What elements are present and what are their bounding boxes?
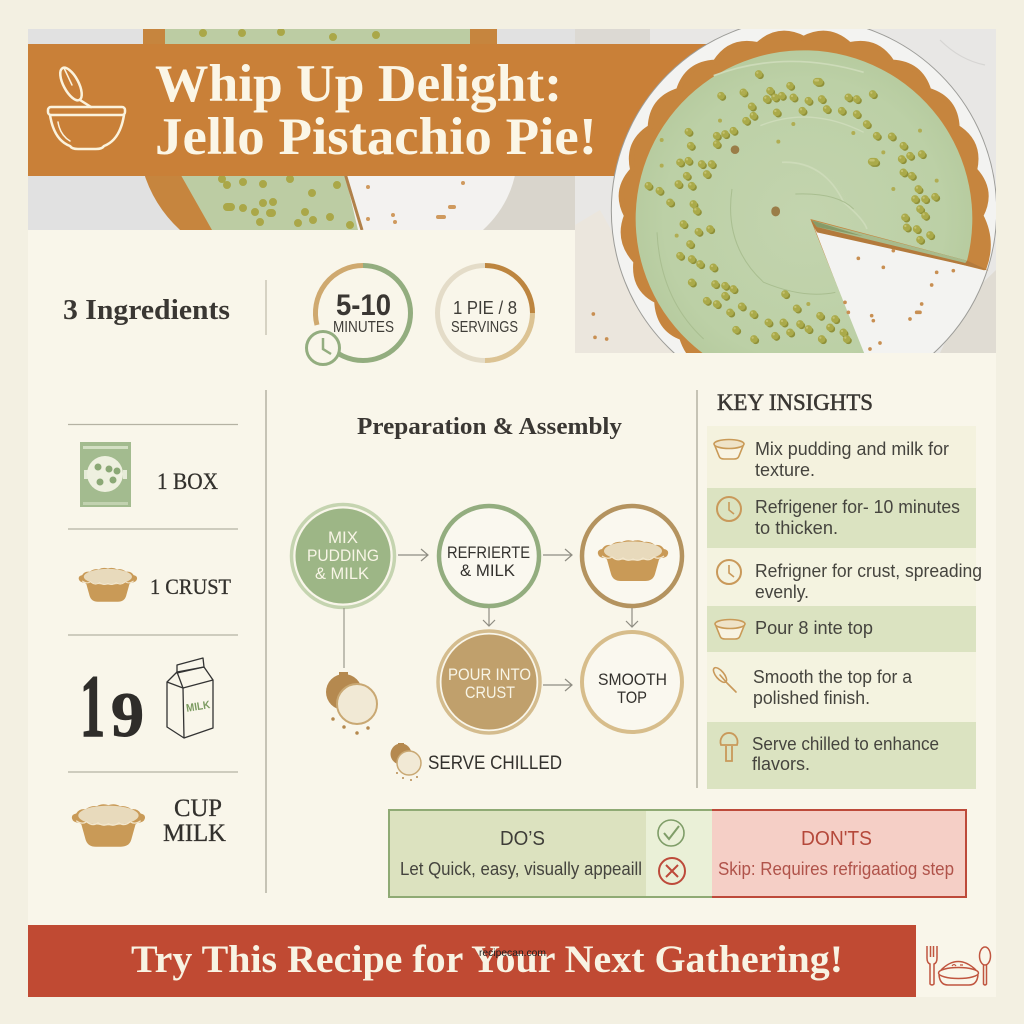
stat ring: time: MINUTES [333, 319, 394, 336]
insight row 2: Refrigener for- 10 minutes [755, 497, 960, 517]
do's text [400, 828, 642, 879]
flow step: refrigerate and milk [439, 506, 539, 606]
icon: pie [72, 804, 145, 847]
insight row 2: to thicken. [755, 518, 838, 538]
footer banner [28, 925, 916, 997]
serve chilled step [390, 743, 562, 780]
stat ring: servings [438, 266, 532, 361]
connector line [343, 608, 345, 668]
insight row 2 [707, 488, 976, 548]
footer banner: recipecan.com [479, 948, 546, 959]
insight row 3 [707, 548, 982, 606]
icon: chilled dessert small [390, 743, 421, 780]
ingredient: cup milk [72, 795, 226, 847]
flow step: smooth top: SMOOTH [598, 670, 667, 689]
icon: fork, pie and spoon [927, 946, 990, 985]
icon: ice cream scoop [720, 733, 738, 761]
flow step: pour into crust: CRUST [465, 683, 515, 702]
don'ts text: DON'TS [801, 828, 872, 850]
serve chilled step: SERVE CHILLED [428, 753, 562, 774]
right header photo: pie with slice removed [592, 29, 996, 353]
do's text: Let Quick, easy, visually appeaill [400, 859, 642, 879]
insight row 3: evenly. [755, 582, 809, 602]
arrow [626, 608, 638, 627]
right header photo background [575, 29, 996, 353]
heading: key insights: KEY INSIGHTS [717, 390, 873, 415]
heading: preparation and assembly: Preparation & Assembly [357, 414, 622, 440]
don'ts text [718, 828, 954, 879]
icon: chilled dessert large [326, 672, 377, 733]
stat ring: time [306, 266, 410, 364]
icon: clock [306, 332, 340, 364]
icon: pudding packet [80, 442, 131, 507]
title text [155, 55, 597, 166]
icon: whisk [711, 666, 736, 692]
flow step: mix pudding and milk: PUDDING [307, 546, 379, 565]
flow step: smooth top [582, 632, 682, 732]
flow step: refrigerate and milk: REFRIERTE [447, 543, 530, 562]
insight row 5: polished finish. [753, 688, 870, 708]
flow step: pour into crust: POUR INTO [448, 665, 531, 684]
insight row 3: Refrigner for crust, spreading [755, 561, 982, 581]
ingredient: pudding box: 1 BOX [157, 469, 218, 494]
insight row 1: Mix pudding and milk for [755, 439, 949, 459]
stat ring: servings: SERVINGS [451, 319, 518, 336]
content panel [28, 230, 996, 997]
don'ts text: Skip: Requires refrigaatiog step [718, 859, 954, 879]
insight row 1 [707, 426, 976, 488]
insight row 4: Pour 8 inte top [755, 618, 873, 638]
icon: check [658, 820, 684, 846]
ingredient: milk quantity: 1 [80, 658, 105, 756]
footer banner: Try This Recipe for Your Next Gathering! [131, 938, 843, 981]
panel: do's and don'ts [389, 810, 966, 897]
insight row 1: texture. [755, 460, 815, 480]
ingredient: cup milk: MILK [163, 820, 226, 847]
insight row 5: Smooth the top for a [753, 667, 913, 687]
arrow [543, 679, 572, 691]
insight row 6 [707, 722, 976, 789]
flow step: refrigerate and milk: & MILK [460, 561, 516, 580]
ingredient: cup milk: CUP [174, 795, 222, 822]
insight row 6: flavors. [752, 754, 810, 774]
flow step: smooth top: TOP [617, 688, 647, 707]
insight row 6: Serve chilled to enhance [752, 734, 939, 754]
arrow [398, 549, 428, 561]
ingredient: crust: 1 CRUST [150, 574, 232, 599]
icon: cross [659, 858, 685, 884]
ingredient: milk quantity: 9 [111, 679, 144, 750]
icon: milk carton: MILK [185, 699, 211, 715]
stat ring: time: 5-10 [336, 289, 391, 322]
flow step: mix pudding and milk: & MILK [315, 564, 370, 583]
orange title banner [28, 44, 712, 176]
ingredient: milk quantity [80, 658, 213, 756]
panel: key insights list [707, 426, 982, 789]
stat ring: servings: 1 PIE / 8 [453, 298, 517, 318]
icon: pie crust [79, 568, 137, 602]
ingredient: pudding box [80, 442, 218, 507]
left header photo: pie [28, 29, 575, 230]
title text: Whip Up Delight: [155, 55, 562, 113]
flow step: mix pudding and milk: MIX [328, 528, 358, 547]
icon: whisk and bowl [48, 65, 125, 149]
ingredient: crust [79, 568, 232, 602]
arrow [483, 608, 495, 626]
insight row 5 [707, 652, 976, 722]
do's text: DO’S [500, 828, 545, 850]
arrow [543, 549, 572, 561]
flow step: mix pudding and milk [292, 504, 394, 608]
stat: 3 ingredients: 3 Ingredients [63, 294, 230, 326]
flow step: pour into crust [438, 631, 540, 733]
insight row 4 [707, 606, 976, 652]
title text: Jello Pistachio Pie! [155, 108, 597, 166]
flow step: pie icon [582, 506, 682, 606]
